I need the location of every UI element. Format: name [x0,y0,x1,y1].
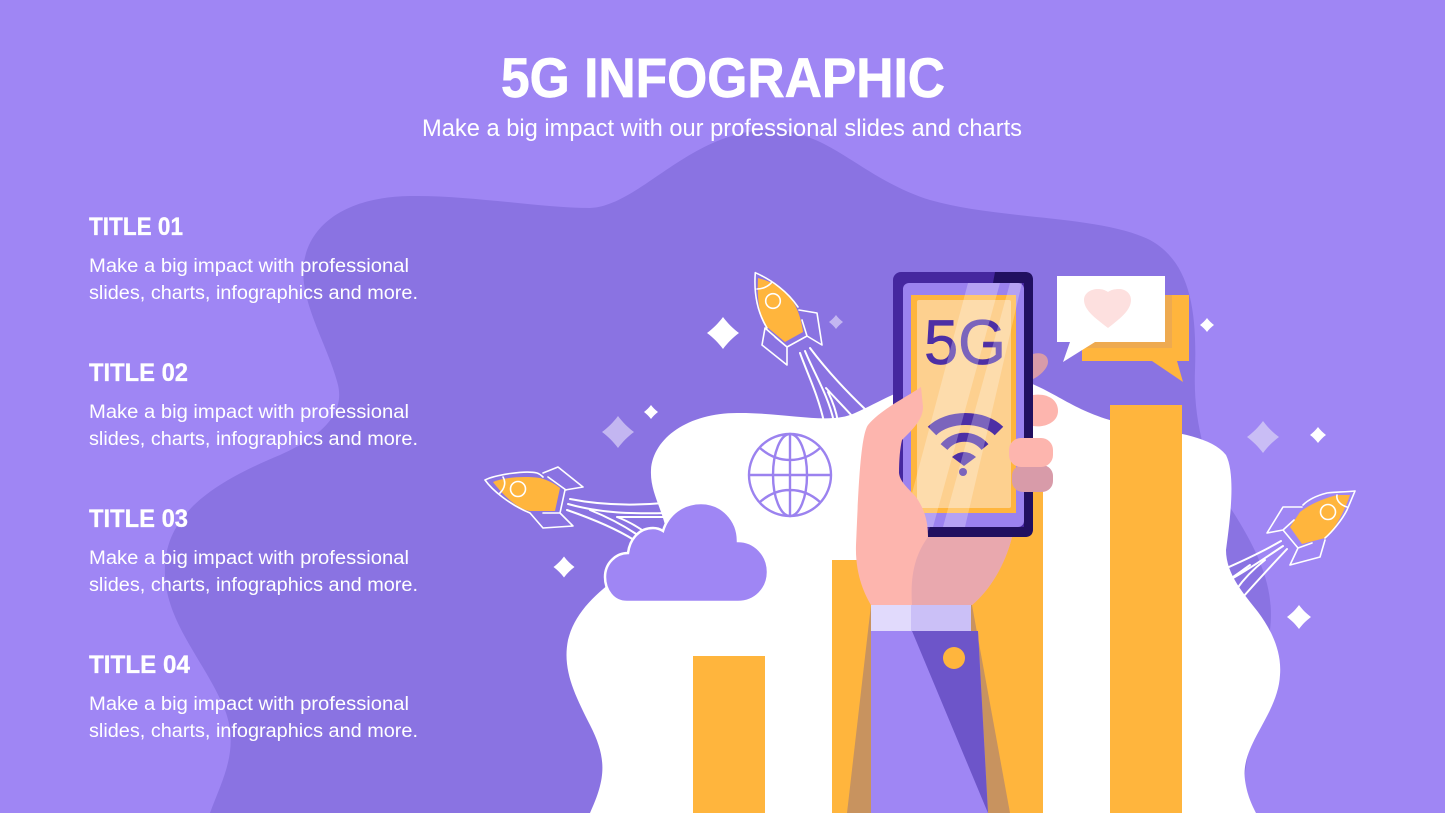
shirt cuff [871,605,971,631]
cuff button [943,647,965,669]
phone [893,272,1033,537]
icon: chat bubbles [1057,276,1189,382]
rocket trails [567,348,1287,597]
text block: title 02 [89,359,418,450]
icon: globe [749,434,831,516]
heading 01: TITLE 01 [89,213,183,241]
icon: rocket right [1267,491,1355,565]
icon: heart [1084,289,1131,328]
5G label: 5G [924,308,1006,378]
heading 04: TITLE 04 [89,651,190,679]
bar 3 [971,490,1043,813]
body 04: Make a big impact with professional [89,694,409,715]
hand shadow [912,537,1012,605]
heading 03: TITLE 03 [89,505,188,533]
subtitle: Make a big impact with our professional slides and charts [422,115,1022,142]
bar chart [693,405,1182,813]
body 04: slides, charts, infographics and more. [89,721,418,742]
white blob [567,383,1280,813]
icon: wifi [932,419,999,476]
body 02: slides, charts, infographics and more. [89,429,418,450]
screen reflections [903,283,1022,527]
bar 1 [693,656,765,813]
icon: rocket top [755,273,822,365]
sleeve [871,631,988,813]
text block: title 04 [89,651,418,742]
text block: title 01 [89,213,418,304]
sparkle stars [554,315,1326,629]
body 03: Make a big impact with professional [89,548,409,569]
back fingers [1033,353,1058,426]
icon: rocket left [485,467,583,528]
body 01: Make a big impact with professional [89,256,409,277]
sleeve shadow [847,605,1010,813]
body 02: Make a big impact with professional [89,402,409,423]
body 01: slides, charts, infographics and more. [89,283,418,304]
background blob [165,130,1271,813]
sleeve fold [912,631,988,813]
front fingers [1009,438,1053,492]
body 03: slides, charts, infographics and more. [89,575,418,596]
title: 5G INFOGRAPHIC [501,46,945,109]
text block: title 03 [89,505,418,596]
icon: cloud [605,503,768,602]
bar 4 [1110,405,1182,813]
bar 2 [832,560,912,813]
heading 02: TITLE 02 [89,359,188,387]
hand [856,387,1012,605]
